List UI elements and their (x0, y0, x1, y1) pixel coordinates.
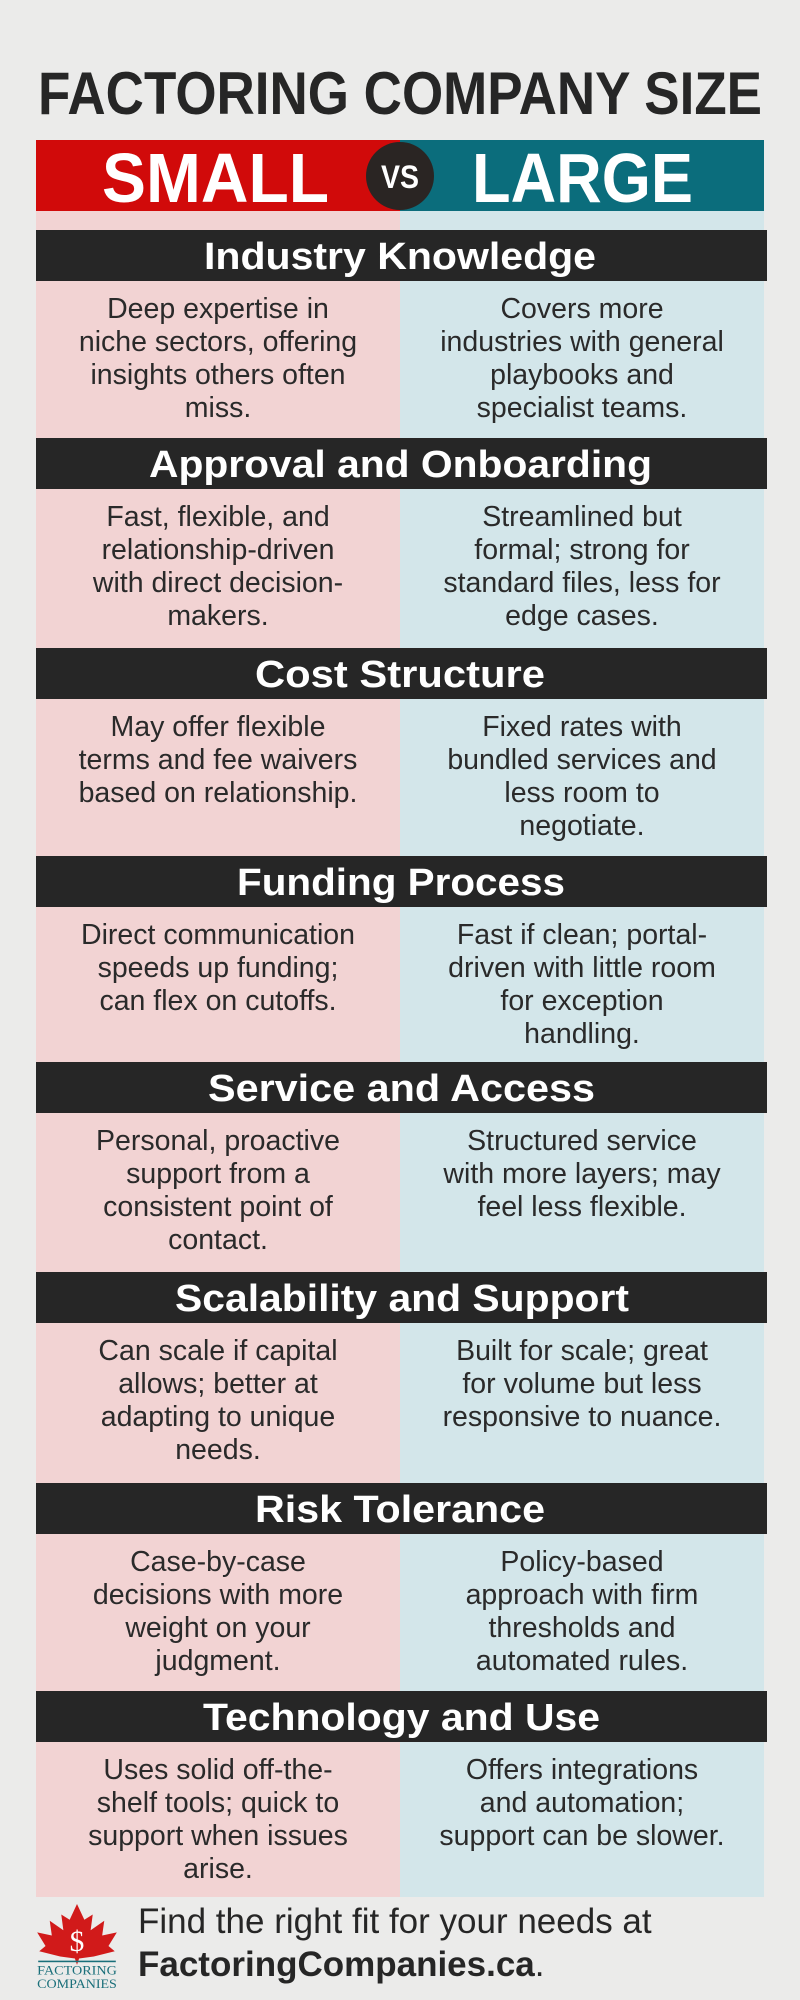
text: small cost: based on relationship. (79, 777, 357, 809)
text: small approval: relationship-driven (102, 534, 334, 566)
text: small scalability: allows; better at (118, 1368, 318, 1400)
text: large risk: approach with firm (466, 1579, 698, 1611)
text: large approval (443, 501, 721, 632)
text: small risk: decisions with more (93, 1579, 343, 1611)
text: large funding (448, 919, 716, 1050)
text: large scalability: for volume but less (462, 1368, 702, 1400)
text: small funding: can flex on cutoffs. (99, 985, 337, 1017)
heading: Risk Tolerance (36, 1483, 767, 1534)
text: large cost: bundled services and (447, 744, 717, 776)
text: large cost (447, 711, 717, 842)
text: large risk (466, 1546, 698, 1677)
text: small technology: shelf tools; quick to (97, 1787, 339, 1819)
heading: Funding Process (36, 856, 767, 907)
text: small cost: terms and fee waivers (79, 744, 357, 776)
text: large approval: edge cases. (505, 600, 659, 632)
text: large funding: Fast if clean; portal- (457, 919, 707, 951)
text: small scalability (98, 1335, 338, 1466)
footer call to action: Find the right fit for your needs at (138, 1902, 652, 1941)
footer call to action (138, 1902, 652, 1984)
text: large approval: Streamlined but (482, 501, 682, 533)
text: large industry: industries with general (440, 326, 724, 358)
heading: Scalability and Support: Scalability and Support (175, 1278, 629, 1320)
text: large industry: specialist teams. (477, 392, 687, 424)
text: large scalability: Built for scale; great (456, 1335, 708, 1367)
heading: Industry Knowledge: Industry Knowledge (204, 236, 596, 278)
text: large industry (440, 293, 724, 424)
text: small approval: Fast, flexible, and (106, 501, 330, 533)
text: small service: consistent point of (103, 1191, 333, 1223)
heading: Technology and Use: Technology and Use (203, 1697, 600, 1739)
panel: small column background (36, 211, 400, 1897)
heading: Cost Structure (36, 648, 767, 699)
text: large funding: handling. (524, 1018, 640, 1050)
text: large technology: Offers integrations (466, 1754, 698, 1786)
text: large scalability (443, 1335, 721, 1433)
text: large funding: for exception (500, 985, 664, 1017)
text: small approval: with direct decision- (93, 567, 343, 599)
heading: Funding Process: Funding Process (237, 862, 565, 904)
text: large approval: standard files, less for (443, 567, 721, 599)
text: small funding: Direct communication (81, 919, 355, 951)
text: small cost (79, 711, 357, 809)
heading: Approval and Onboarding (36, 438, 767, 489)
text: small technology: arise. (183, 1853, 253, 1885)
heading: Technology and Use (36, 1691, 767, 1742)
heading: Approval and Onboarding: Approval and Onboarding (149, 444, 652, 486)
text: small scalability: adapting to unique (101, 1401, 335, 1433)
text: large risk: Policy-based (500, 1546, 664, 1578)
text: large service: with more layers; may (443, 1158, 721, 1190)
icon: factoring companies logo: FACTORING (37, 1962, 117, 1977)
text: small scalability: needs. (175, 1434, 261, 1466)
text: small approval (92, 501, 343, 632)
icon: factoring companies logo: $ (70, 1926, 84, 1958)
text: large technology: support can be slower. (439, 1820, 725, 1852)
banner: small vs large: VS (381, 159, 419, 195)
heading: Industry Knowledge (36, 230, 767, 281)
text: large service (443, 1125, 721, 1223)
heading: Cost Structure: Cost Structure (255, 654, 545, 696)
text: small technology: support when issues (88, 1820, 348, 1852)
text: small industry: niche sectors, offering (79, 326, 357, 358)
text: small industry (79, 293, 357, 424)
icon: factoring companies logo (37, 1904, 117, 1990)
text: small technology: Uses solid off-the- (103, 1754, 333, 1786)
text: large service: feel less flexible. (477, 1191, 687, 1223)
text: large approval: formal; strong for (474, 534, 690, 566)
text: large risk: thresholds and (489, 1612, 675, 1644)
text: large risk: automated rules. (476, 1645, 688, 1677)
text: large technology: and automation; (480, 1787, 684, 1819)
text: large cost: negotiate. (519, 810, 645, 842)
panel: large column background (400, 211, 764, 1897)
text: small service: contact. (168, 1224, 268, 1256)
text: small risk: weight on your (125, 1612, 311, 1644)
text: small risk (93, 1546, 343, 1677)
text: small cost: May offer flexible (111, 711, 325, 743)
text: small risk: judgment. (155, 1645, 281, 1677)
text: small service: support from a (126, 1158, 310, 1190)
text: small industry: insights others often (90, 359, 346, 391)
text: small risk: Case-by-case (130, 1546, 306, 1578)
text: small industry: miss. (185, 392, 251, 424)
text: small technology (88, 1754, 348, 1885)
text: large cost: less room to (504, 777, 660, 809)
heading: Risk Tolerance: Risk Tolerance (255, 1489, 545, 1531)
text: large industry: Covers more (500, 293, 664, 325)
text: small industry: Deep expertise in (107, 293, 329, 325)
heading: Service and Access (36, 1062, 767, 1113)
heading: Service and Access: Service and Access (208, 1068, 595, 1110)
text: small scalability: Can scale if capital (98, 1335, 338, 1367)
text: small funding (81, 919, 355, 1017)
heading: Scalability and Support (36, 1272, 767, 1323)
text: large technology (439, 1754, 725, 1852)
footer call to action: FactoringCompanies.ca. (138, 1945, 544, 1984)
text: large cost: Fixed rates with (482, 711, 682, 743)
banner: small vs large (36, 140, 764, 211)
text: large funding: driven with little room (448, 952, 716, 984)
text: small service: Personal, proactive (96, 1125, 340, 1157)
text: large scalability: responsive to nuance. (443, 1401, 721, 1433)
text: large service: Structured service (467, 1125, 697, 1157)
text: small approval: makers. (167, 600, 269, 632)
text: small service (96, 1125, 340, 1256)
text: large industry: playbooks and (490, 359, 674, 391)
text: small funding: speeds up funding; (98, 952, 338, 984)
